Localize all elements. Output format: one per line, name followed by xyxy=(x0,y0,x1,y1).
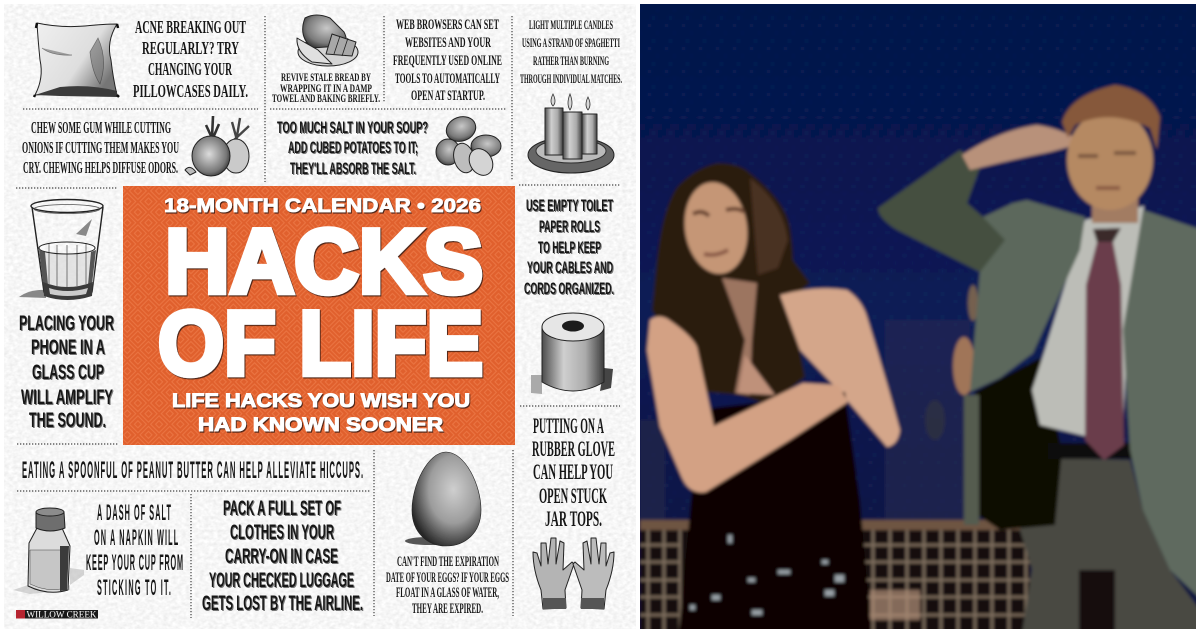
text: glass cup tip: PLACING YOUR xyxy=(19,312,114,335)
panel: calendar cover: THROUGH INDIVIDUAL MATCHES. xyxy=(520,71,622,86)
text: stale bread tip: REVIVE STALE BREAD BY xyxy=(281,72,371,84)
icon: bread loaf xyxy=(297,15,358,66)
text: salty soup tip xyxy=(277,118,428,178)
text: acne tip: CHANGING YOUR xyxy=(148,59,233,79)
man forearm and hand xyxy=(962,125,1083,170)
man neck xyxy=(1092,195,1138,223)
dress sparkles xyxy=(690,535,844,615)
icon: salt shaker xyxy=(13,508,84,594)
text: glass cup tip: GLASS CUP xyxy=(32,361,104,384)
woman chest xyxy=(722,278,757,395)
icon: egg xyxy=(405,452,481,546)
text: salty soup tip: TOO MUCH SALT IN YOUR SOUP? xyxy=(277,118,428,137)
text: salty soup tip: THEY'LL ABSORB THE SALT. xyxy=(290,159,416,178)
text: expired eggs tip: CAN'T FIND THE EXPIRATION xyxy=(397,554,499,570)
text: rubber glove tip xyxy=(532,413,615,531)
dotted dividers xyxy=(16,16,621,618)
text: rubber glove tip: PUTTING ON A xyxy=(533,413,604,438)
text: web browsers tip: WEB BROWSERS CAN SET xyxy=(396,17,499,33)
text: candles tip xyxy=(520,17,622,86)
photo backdrop xyxy=(630,0,1200,633)
title: of life: OF LIFE xyxy=(158,294,483,394)
text: expired eggs tip xyxy=(386,554,509,617)
text: stale bread tip xyxy=(272,72,380,105)
text: toilet roll tip: PAPER ROLLS xyxy=(539,217,600,236)
text: toilet roll tip: YOUR CABLES AND xyxy=(527,258,613,277)
text: expired eggs tip: THEY ARE EXPIRED. xyxy=(412,601,483,617)
panel: talk show photo xyxy=(630,0,1200,633)
building lights xyxy=(640,285,978,520)
panel: calendar cover: DATE OF YOUR EGGS? IF YOUR EGGS xyxy=(386,570,509,586)
text: web browsers tip: WEBSITES AND YOUR xyxy=(405,35,491,51)
text: web browsers tip: TOOLS TO AUTOMATICALLY xyxy=(395,71,500,87)
man shirt xyxy=(1032,206,1144,445)
text: stale bread tip: WRAPPING IT IN A DAMP xyxy=(280,83,372,95)
woman arm far xyxy=(780,288,900,447)
text: glass cup tip xyxy=(19,312,114,432)
text: toilet roll tip: USE EMPTY TOILET xyxy=(526,196,613,215)
icon: rubber gloves xyxy=(533,538,614,609)
paper background xyxy=(4,4,636,629)
panel: calendar cover: USING A STRAND OF SPAGHETTI xyxy=(522,35,620,50)
man face xyxy=(1067,110,1153,210)
man belt xyxy=(1048,443,1133,459)
icon: candles on plate xyxy=(528,94,614,173)
text: glass cup tip: PHONE IN A xyxy=(31,336,105,359)
text: toilet roll tip xyxy=(524,196,614,298)
man jacket left xyxy=(970,200,1085,392)
text: salt on napkin tip: A DASH OF SALT xyxy=(97,501,171,525)
panel: calendar cover xyxy=(4,4,636,629)
icon: water glass xyxy=(19,200,103,300)
text: carry-on tip xyxy=(202,497,363,615)
text: glass cup tip: THE SOUND. xyxy=(29,409,106,432)
text: candles tip: RATHER THAN BURNING xyxy=(533,53,609,68)
man xyxy=(878,85,1200,633)
man jacket right xyxy=(1123,210,1200,600)
text: expired eggs tip: FLOAT IN A GLASS OF WATER, xyxy=(396,585,499,601)
icon: pillow xyxy=(34,23,119,97)
text: acne tip: ACNE BREAKING OUT xyxy=(135,17,246,37)
logo: willow creek: WILLOW CREEK xyxy=(26,611,97,621)
text: peanut butter tip: EATING A SPOONFUL OF PEANUT BUTTER CAN HELP ALLEVIATE HICCUPS. xyxy=(22,456,363,483)
woman face xyxy=(679,178,753,278)
text: salt on napkin tip xyxy=(86,501,183,600)
woman dress xyxy=(678,392,872,633)
text: onion tip: CHEW SOME GUM WHILE CUTTING xyxy=(31,118,171,137)
panel: calendar cover: CRY. CHEWING HELPS DIFFUSE ODORS. xyxy=(23,158,178,177)
text: web browsers tip xyxy=(393,17,502,104)
icon: potatoes xyxy=(436,113,501,180)
text: acne tip: REGULARLY? TRY xyxy=(142,38,239,58)
text: web browsers tip: OPEN AT STARTUP. xyxy=(411,88,485,104)
man sleeve xyxy=(878,150,1005,272)
text: rubber glove tip: OPEN STUCK xyxy=(539,483,607,508)
subtitle line two: HAD KNOWN SOONER xyxy=(198,414,443,436)
text: toilet roll tip: CORDS ORGANIZED. xyxy=(524,279,614,298)
text: carry-on tip: CLOTHES IN YOUR xyxy=(230,521,334,544)
panel: calendar cover: RUBBER GLOVE xyxy=(532,436,615,461)
text: carry-on tip: PACK A FULL SET OF xyxy=(223,497,341,520)
man pants xyxy=(1020,458,1200,633)
icon: toilet paper roll xyxy=(531,313,613,394)
text: salt on napkin tip: KEEP YOUR CUP FROM xyxy=(86,551,183,575)
woman hair xyxy=(652,163,810,405)
text: glass cup tip: WILL AMPLIFY xyxy=(21,386,113,409)
text: candles tip: LIGHT MULTIPLE CANDLES xyxy=(529,17,613,32)
text: toilet roll tip: TO HELP KEEP xyxy=(538,238,601,257)
text: salt on napkin tip: STICKING TO IT. xyxy=(97,576,171,600)
text: carry-on tip: YOUR CHECKED LUGGAGE xyxy=(209,569,354,592)
panel: calendar cover: CAN HELP YOU xyxy=(533,459,613,484)
text: acne tip: PILLOWCASES DAILY. xyxy=(133,81,248,101)
heading: calendar line: 18-MONTH CALENDAR • 2026 xyxy=(164,195,481,217)
text: salty soup tip: ADD CUBED POTATOES TO IT; xyxy=(288,138,418,157)
woman xyxy=(647,163,900,633)
subtitle line one: LIFE HACKS YOU WISH YOU xyxy=(172,390,470,412)
text: web browsers tip: FREQUENTLY USED ONLINE xyxy=(393,53,502,69)
title: hacks: HACKS xyxy=(165,212,483,312)
man jacket inner shadow xyxy=(975,358,1062,530)
man hair xyxy=(1062,85,1160,150)
text: rubber glove tip: JAR TOPS. xyxy=(545,506,602,531)
icon: onions xyxy=(185,116,249,176)
panel: orange title block xyxy=(123,186,515,445)
railing and grid xyxy=(640,520,1030,633)
text: acne tip xyxy=(133,17,248,101)
panel: calendar cover: ONIONS IF CUTTING THEM MAKES YOU xyxy=(22,138,179,157)
text: onion tip xyxy=(22,118,179,177)
text: salt on napkin tip: ON A NAPKIN WILL xyxy=(94,526,178,550)
text: carry-on tip: GETS LOST BY THE AIRLINE. xyxy=(202,592,363,615)
man tie xyxy=(1085,228,1124,460)
text: stale bread tip: TOWEL AND BAKING BRIEFLY. xyxy=(272,93,380,105)
woman arm near xyxy=(647,316,848,492)
text: carry-on tip: CARRY-ON IN CASE xyxy=(225,545,338,568)
